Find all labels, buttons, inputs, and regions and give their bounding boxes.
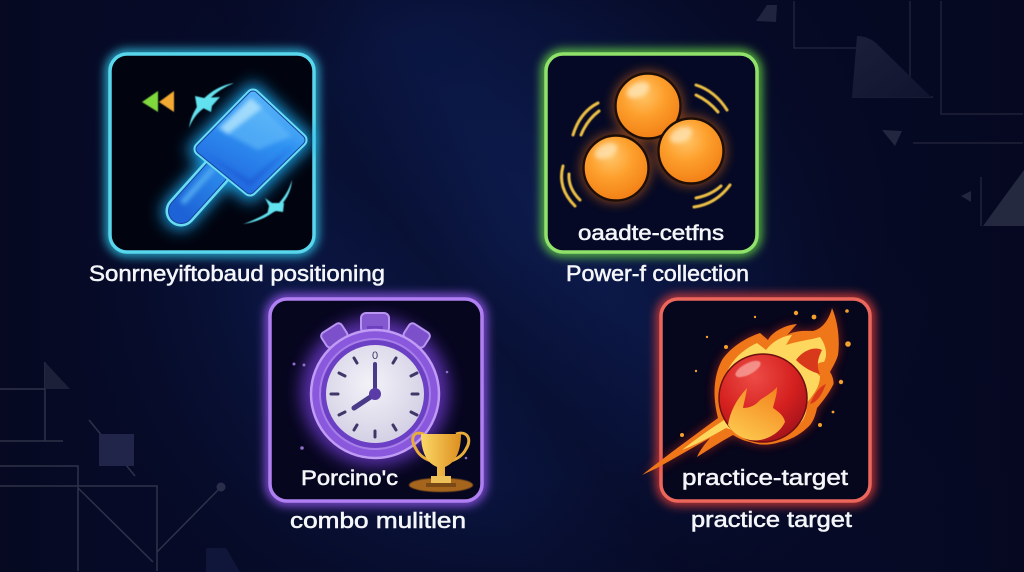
panel frame: purple <box>270 299 482 501</box>
label inside panel: Porcino'c <box>301 467 398 490</box>
embers <box>680 309 851 437</box>
icon: three orange balls <box>580 70 727 204</box>
panel: practice target <box>642 299 870 501</box>
panel frame: green <box>546 54 757 252</box>
panel: power-up collection <box>546 54 757 252</box>
panel: combo multiplier <box>270 299 482 501</box>
panel frame: cyan <box>110 54 314 252</box>
decorative geometry: bottom left <box>0 362 240 572</box>
icon: stopwatch <box>301 313 449 466</box>
clock ticks <box>331 358 418 437</box>
icon: motion swooshes <box>189 83 292 224</box>
label inside panel: oaadte-cetfns <box>578 222 724 245</box>
panel: paddle positioning <box>110 54 314 252</box>
label: paddle positioning: Sonrneyiftobaud positioning <box>89 261 385 286</box>
label inside panel: practice-target <box>682 465 848 490</box>
icon: blue paddle <box>180 88 308 212</box>
icon: stopwatch: 0 <box>372 350 378 362</box>
decorative geometry: top right <box>756 1 1024 226</box>
icon: motion lines <box>562 85 730 207</box>
label: power-up collection: Power-f collection <box>566 261 749 286</box>
icon: sparks <box>292 362 467 459</box>
label: combo multiplier: combo mulitlen <box>290 508 466 533</box>
panel frame: red <box>661 299 870 501</box>
label: practice target: practice target <box>691 507 852 532</box>
icon: gold trophy <box>409 433 473 492</box>
icon: flaming ball <box>642 308 851 475</box>
icon: double arrows <box>142 91 174 112</box>
